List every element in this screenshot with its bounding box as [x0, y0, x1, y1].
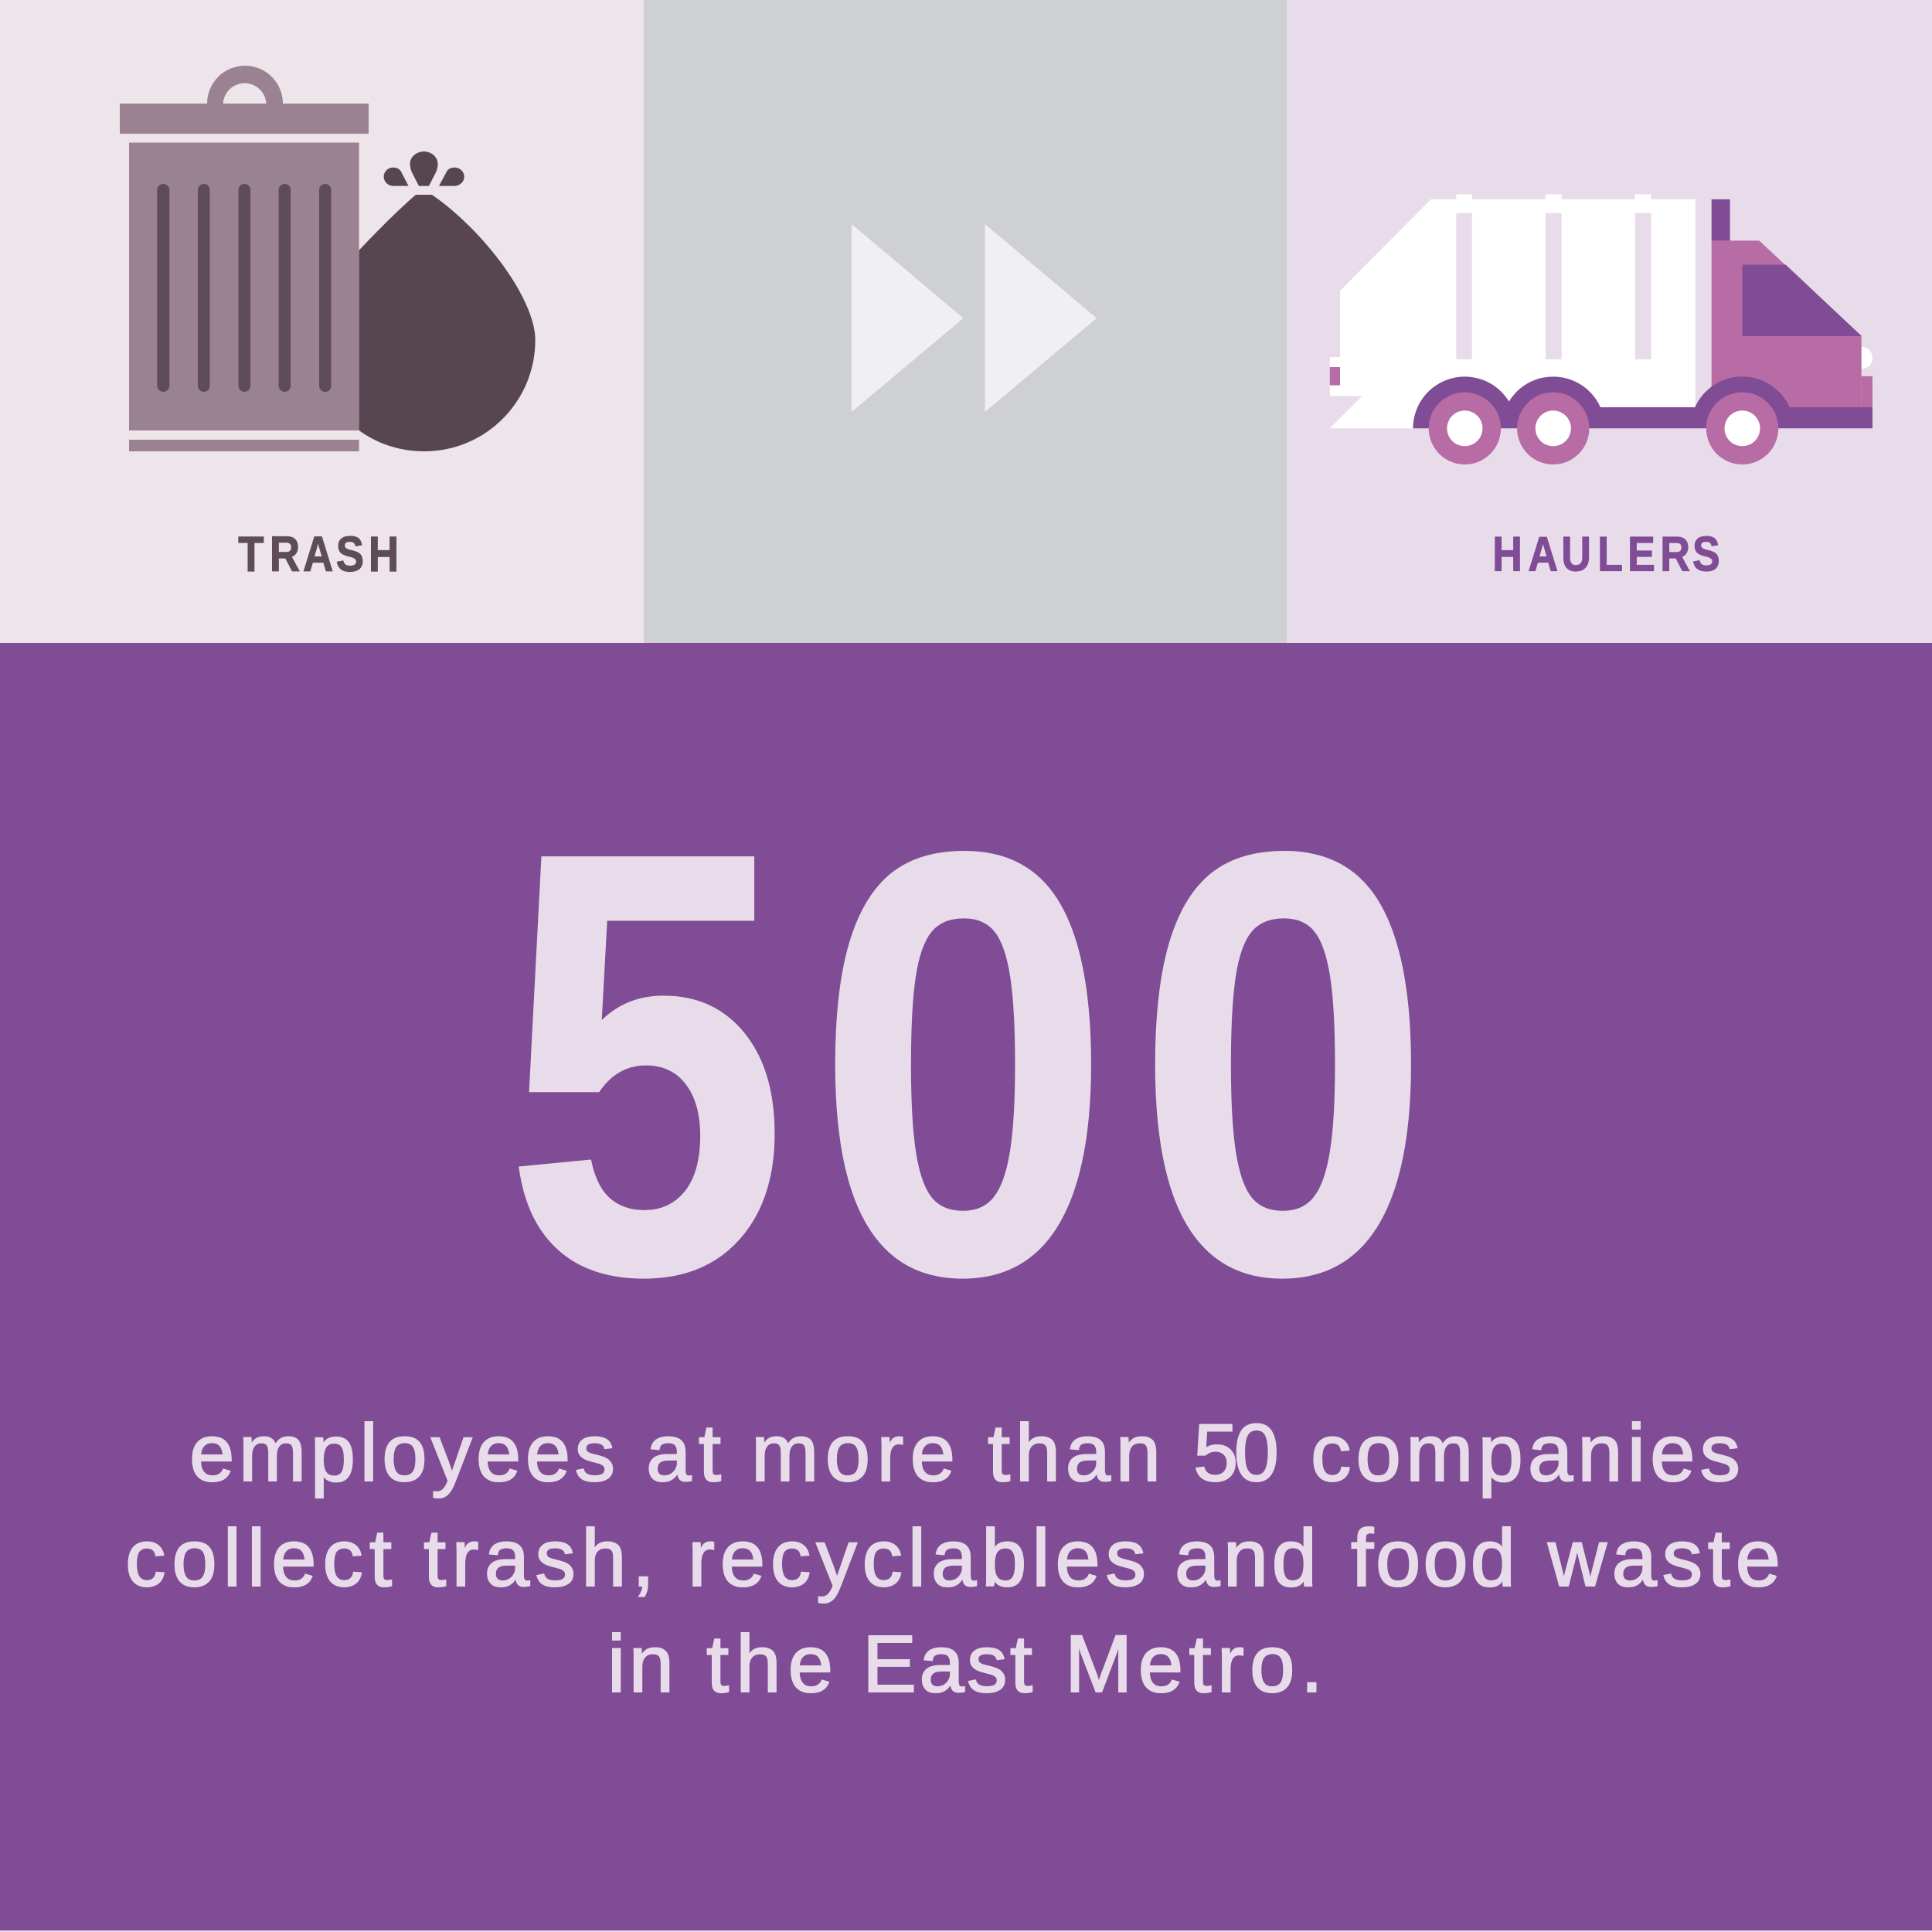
text: description: companies — [1311, 1408, 1740, 1498]
text: description: more — [751, 1408, 955, 1498]
text: description: employees — [189, 1408, 615, 1498]
text: description: trash, — [423, 1513, 655, 1604]
text: description — [125, 1408, 1781, 1709]
icon: fast-forward arrows — [852, 224, 1097, 412]
icon: garbage truck — [1330, 194, 1872, 464]
text: description: the — [706, 1619, 833, 1709]
icon: trash can — [120, 66, 369, 451]
big number: 500: 5 — [505, 727, 787, 1399]
big number: 500 — [505, 727, 1431, 1399]
text: description: at — [646, 1408, 721, 1498]
text: description: recyclables — [688, 1513, 1146, 1604]
big number: 500: 0 — [815, 730, 1111, 1399]
icon: trash bag — [359, 151, 536, 451]
text: description: 50 — [1193, 1408, 1279, 1498]
panel: statistic — [0, 643, 1932, 1932]
big number: 500: 0 — [1135, 730, 1431, 1399]
text: description: collect — [125, 1513, 392, 1604]
panel: haulers — [1287, 0, 1932, 643]
text: description: in — [607, 1619, 674, 1709]
panel: arrows — [644, 0, 1287, 643]
text: description: and — [1175, 1513, 1317, 1604]
text: description: than — [988, 1408, 1161, 1498]
text: description: East — [862, 1619, 1032, 1709]
label: trash: TRASH — [238, 526, 399, 582]
text: description: food — [1351, 1513, 1515, 1604]
panel: trash — [0, 0, 644, 643]
label: haulers: HAULERS — [1492, 527, 1720, 582]
text: description: Metro. — [1065, 1619, 1323, 1709]
text: description: waste — [1547, 1513, 1781, 1604]
